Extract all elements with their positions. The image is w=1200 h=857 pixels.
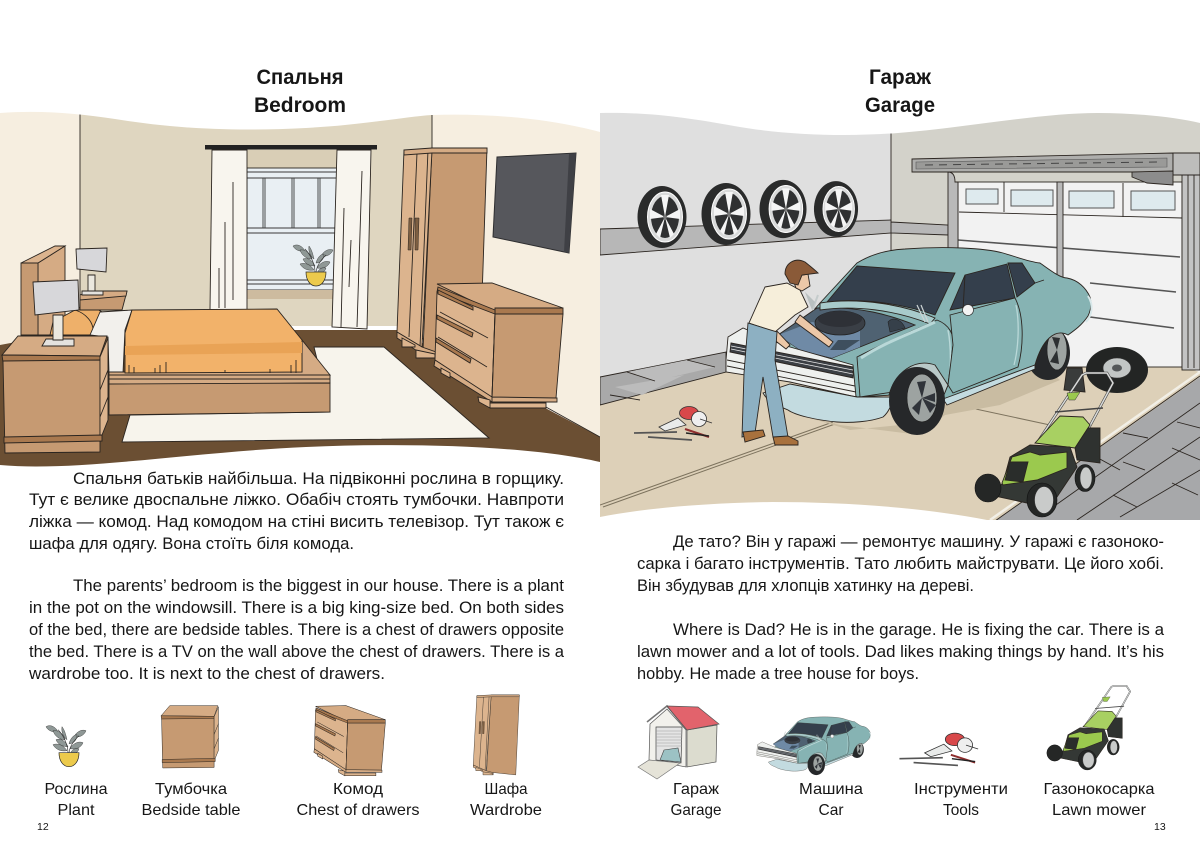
label: wardrobe: Шафа <box>484 781 528 798</box>
icon: tools <box>899 733 978 765</box>
text: garage Ukrainian paragraph: Де тато? Він у гаражі — ремонтує машину. У гаражі є газоноко- <box>673 533 1164 551</box>
text: garage English paragraph: lawn mower and a lot of tools. Dad likes making things by hand. It’s his <box>637 643 1164 661</box>
label: bedside table: Bedside table <box>142 802 241 819</box>
text: bedroom Ukrainian paragraph: шафа для одягу. Вона стоїть біля комода. <box>29 535 354 553</box>
curtain rod <box>205 145 377 150</box>
text: bedroom Ukrainian paragraph: ліжка — комод. Над комодом на стіні висить телевізор. Тут також є <box>29 513 564 531</box>
text: garage English paragraph: Where is Dad? He is in the garage. He is fixing the car. There is a <box>673 621 1165 639</box>
heading: garage: Garage <box>865 94 935 117</box>
label: chest of drawers: Chest of drawers <box>296 802 420 819</box>
text: bedroom Ukrainian paragraph: Тут є велике двоспальне ліжко. Обабіч стоять тумбочки. Навпроти <box>29 491 564 509</box>
front lamp <box>33 280 79 346</box>
label: tools <box>914 781 1008 819</box>
right wall <box>423 114 600 436</box>
heading: bedroom: Спальня <box>256 66 344 89</box>
label: car <box>799 781 863 819</box>
label: tools: Інструменти <box>914 781 1008 798</box>
icon: bedside table <box>161 706 218 768</box>
label: tools: Tools <box>943 802 979 819</box>
chest of drawers <box>434 283 563 408</box>
right curtain <box>332 150 371 329</box>
bed <box>21 246 330 415</box>
label: plant: Plant <box>58 802 95 819</box>
label: plant: Рослина <box>44 781 108 798</box>
page number right: 13 <box>1154 821 1166 833</box>
wall stripe <box>600 220 948 255</box>
label: lawn mower: Lawn mower <box>1052 802 1147 819</box>
man repairing the car <box>742 260 833 445</box>
left wall <box>0 112 80 345</box>
door rail and opener <box>912 153 1200 185</box>
back wall <box>80 100 433 326</box>
plant on windowsill <box>293 245 333 286</box>
right tiled strip <box>990 372 1200 521</box>
wall TV <box>493 153 576 253</box>
label: wardrobe <box>470 781 542 819</box>
label: garage <box>670 781 722 819</box>
car shadow <box>814 371 1060 435</box>
label: plant <box>44 781 108 819</box>
illustration: garage scene <box>600 100 1200 530</box>
rug <box>122 347 489 442</box>
text: garage Ukrainian paragraph <box>637 533 1164 595</box>
page number left: 12 <box>37 821 49 833</box>
label: chest of drawers: Комод <box>333 781 384 798</box>
text: garage Ukrainian paragraph: сарка і багато інструментів. Тато любить майструвати. Це його хобі. <box>637 555 1164 573</box>
label: wardrobe: Wardrobe <box>470 802 542 819</box>
icon: chest of drawers <box>314 706 385 776</box>
text: bedroom English paragraph: The parents’ bedroom is the biggest in our house. There is a plant <box>73 577 564 595</box>
label: bedside table <box>142 781 241 819</box>
left curtain <box>210 150 247 310</box>
label: chest of drawers <box>296 781 420 819</box>
text: bedroom English paragraph: the bed. There is a TV on the wall above the chest of drawers. There is a <box>29 643 565 661</box>
heading: garage <box>865 66 935 117</box>
wall-mounted tyres <box>638 180 858 248</box>
text: bedroom English paragraph: of the bed, there are bedside tables. There is a chest of drawers opposite <box>29 621 564 639</box>
icon: wardrobe <box>473 695 519 775</box>
text: bedroom English paragraph: wardrobe too. It is next to the chest of drawers. <box>28 665 385 683</box>
label: garage: Гараж <box>673 781 719 798</box>
wardrobe <box>397 148 487 358</box>
garage door <box>948 170 1200 370</box>
window <box>247 150 337 299</box>
label: car: Машина <box>799 781 863 798</box>
text: bedroom Ukrainian paragraph: Спальня батьків найбільша. На підвіконні рослина в горщику. <box>73 470 564 488</box>
heading: bedroom: Bedroom <box>254 94 346 117</box>
heading: bedroom <box>254 66 346 117</box>
floor <box>0 330 600 480</box>
text: bedroom English paragraph <box>28 577 565 683</box>
text: garage English paragraph <box>637 621 1165 683</box>
text: garage English paragraph: hobby. He made a tree house for boys. <box>637 665 919 683</box>
floor seam <box>600 402 1092 507</box>
lawn mower <box>975 373 1113 517</box>
right wall <box>892 113 1200 250</box>
tools on the floor <box>634 406 712 440</box>
back bedside table and lamp <box>76 248 127 310</box>
label: lawn mower: Газонокосарка <box>1044 781 1155 798</box>
label: car: Car <box>818 802 844 819</box>
icon: plant <box>46 726 86 767</box>
spare tyre <box>1064 347 1148 393</box>
left tiled strip <box>600 352 726 405</box>
left wall <box>600 113 890 376</box>
label: lawn mower <box>1044 781 1155 819</box>
front bedside table <box>2 336 108 453</box>
text: bedroom Ukrainian paragraph <box>29 470 564 553</box>
text: bedroom English paragraph: in the pot on the windowsill. There is a big king-size bed. On both sides <box>29 599 564 617</box>
illustration: bedroom scene <box>0 100 600 480</box>
icon: garage building <box>638 706 719 779</box>
icon: lawn mower <box>1047 686 1130 770</box>
teal car <box>726 248 1092 435</box>
icon: car <box>757 717 871 775</box>
label: bedside table: Тумбочка <box>155 781 227 798</box>
label: garage: Garage <box>670 802 722 819</box>
text: garage Ukrainian paragraph: Він збудував для хлопців хатинку на дереві. <box>637 577 974 595</box>
floor <box>600 368 1200 520</box>
heading: garage: Гараж <box>869 66 932 89</box>
